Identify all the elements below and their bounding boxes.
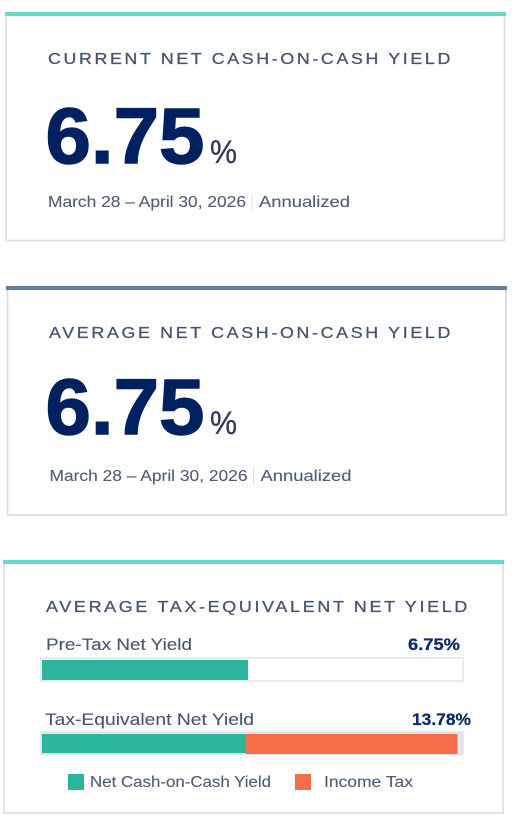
row: pre-tax net yield <box>41 636 463 681</box>
date range: March 28 – April 30, 2026 <box>50 468 248 485</box>
unit: percent sign: % <box>210 405 237 441</box>
separator <box>252 194 253 210</box>
legend swatch: income tax <box>295 774 311 790</box>
heading: current yield: CURRENT NET CASH-ON-CASH YIELD <box>48 51 453 68</box>
panel: current net cash-on-cash yield <box>5 12 506 240</box>
legend label: net cash-on-cash yield: Net Cash-on-Cash Yield <box>90 774 271 791</box>
heading: tax-equivalent yield: AVERAGE TAX-EQUIVALENT NET YIELD <box>46 599 470 616</box>
value: tax-equivalent: 13.78% <box>412 711 471 729</box>
date range: March 28 – April 30, 2026 <box>48 194 246 211</box>
legend swatch: net cash-on-cash yield <box>68 774 84 790</box>
annualized label: Annualized <box>260 468 352 485</box>
stacked bar: tax-equivalent <box>41 732 463 754</box>
value: current yield: 6.75 <box>46 91 204 180</box>
annualized label: Annualized <box>259 194 350 211</box>
panel: average tax-equivalent net yield <box>3 560 504 813</box>
row: tax-equivalent net yield <box>41 711 471 754</box>
value: pre-tax: 6.75% <box>408 636 460 654</box>
legend label: income tax: Income Tax <box>324 774 413 791</box>
heading: average yield: AVERAGE NET CASH-ON-CASH YIELD <box>49 325 453 342</box>
unit: percent sign: % <box>210 134 237 170</box>
separator <box>253 468 254 484</box>
value: average yield: 6.75 <box>46 362 204 451</box>
bar: pre-tax <box>41 658 463 681</box>
label: pre-tax: Pre-Tax Net Yield <box>46 636 192 654</box>
panel: average net cash-on-cash yield <box>6 286 507 515</box>
label: tax-equivalent: Tax-Equivalent Net Yield <box>45 711 254 729</box>
legend <box>68 774 413 791</box>
